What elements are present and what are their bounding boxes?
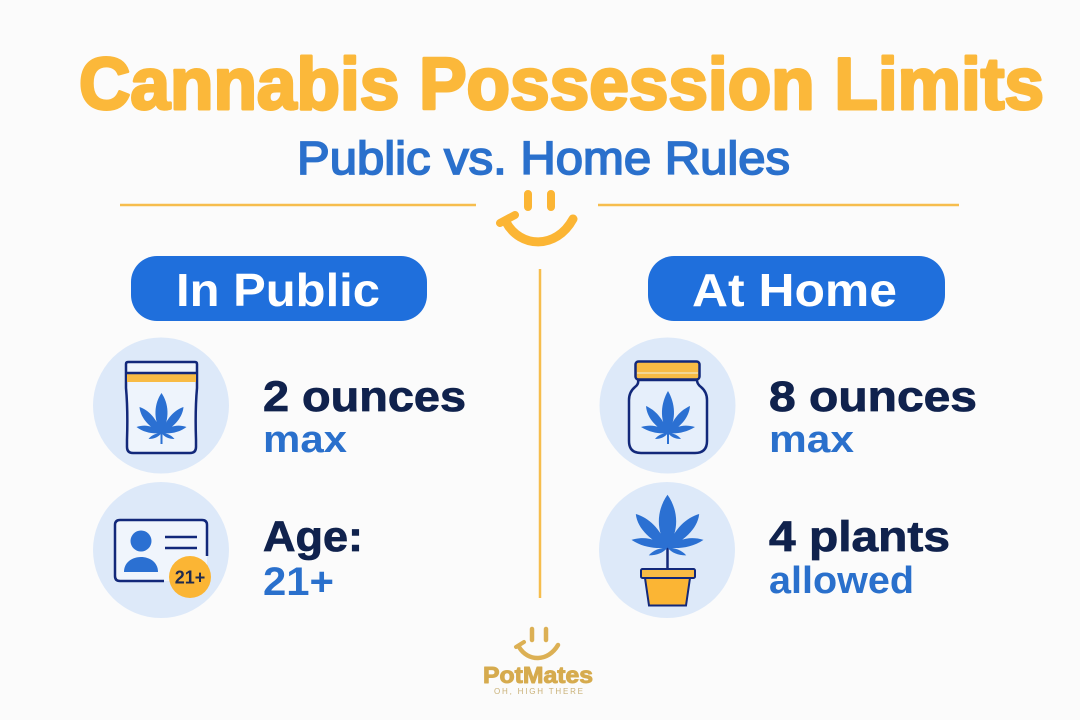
text: age 21+ [263, 513, 363, 604]
text: 4 plants allowed: allowed [769, 560, 914, 602]
panel: at home [599, 256, 977, 618]
logo: potmates: PotMates [483, 662, 593, 688]
subtitle: Public vs. Home Rules [297, 132, 790, 184]
icon: id card 21+ [93, 482, 229, 618]
text: 2 ounces max: max [263, 419, 347, 461]
heading pill: in public [131, 256, 427, 321]
heading pill: at home: At Home [692, 264, 897, 316]
icon: potted plant [599, 482, 735, 618]
text: 8 ounces max: max [769, 419, 854, 461]
text: 2 ounces max [263, 373, 466, 461]
icon: cannabis jar [600, 338, 736, 474]
text: age 21+: Age: [263, 513, 363, 561]
logo: potmates: OH, HIGH THERE [494, 687, 583, 696]
icon: smiley divider [500, 194, 573, 242]
text: 2 ounces max: 2 ounces [263, 373, 466, 421]
text: 8 ounces max: 8 ounces [769, 373, 977, 421]
panel: in public [93, 256, 466, 618]
heading pill: at home [648, 256, 945, 321]
text: 4 plants allowed [769, 513, 950, 602]
logo: potmates [483, 629, 593, 696]
heading pill: in public: In Public [176, 264, 380, 316]
text: 8 ounces max [769, 373, 977, 461]
icon: cannabis bag [93, 338, 229, 474]
text: 4 plants allowed: 4 plants [769, 513, 950, 561]
text: age 21+: 21+ [263, 560, 334, 604]
title: Cannabis Possession Limits [79, 44, 1044, 125]
icon: id card 21+: 21+ [175, 568, 205, 588]
